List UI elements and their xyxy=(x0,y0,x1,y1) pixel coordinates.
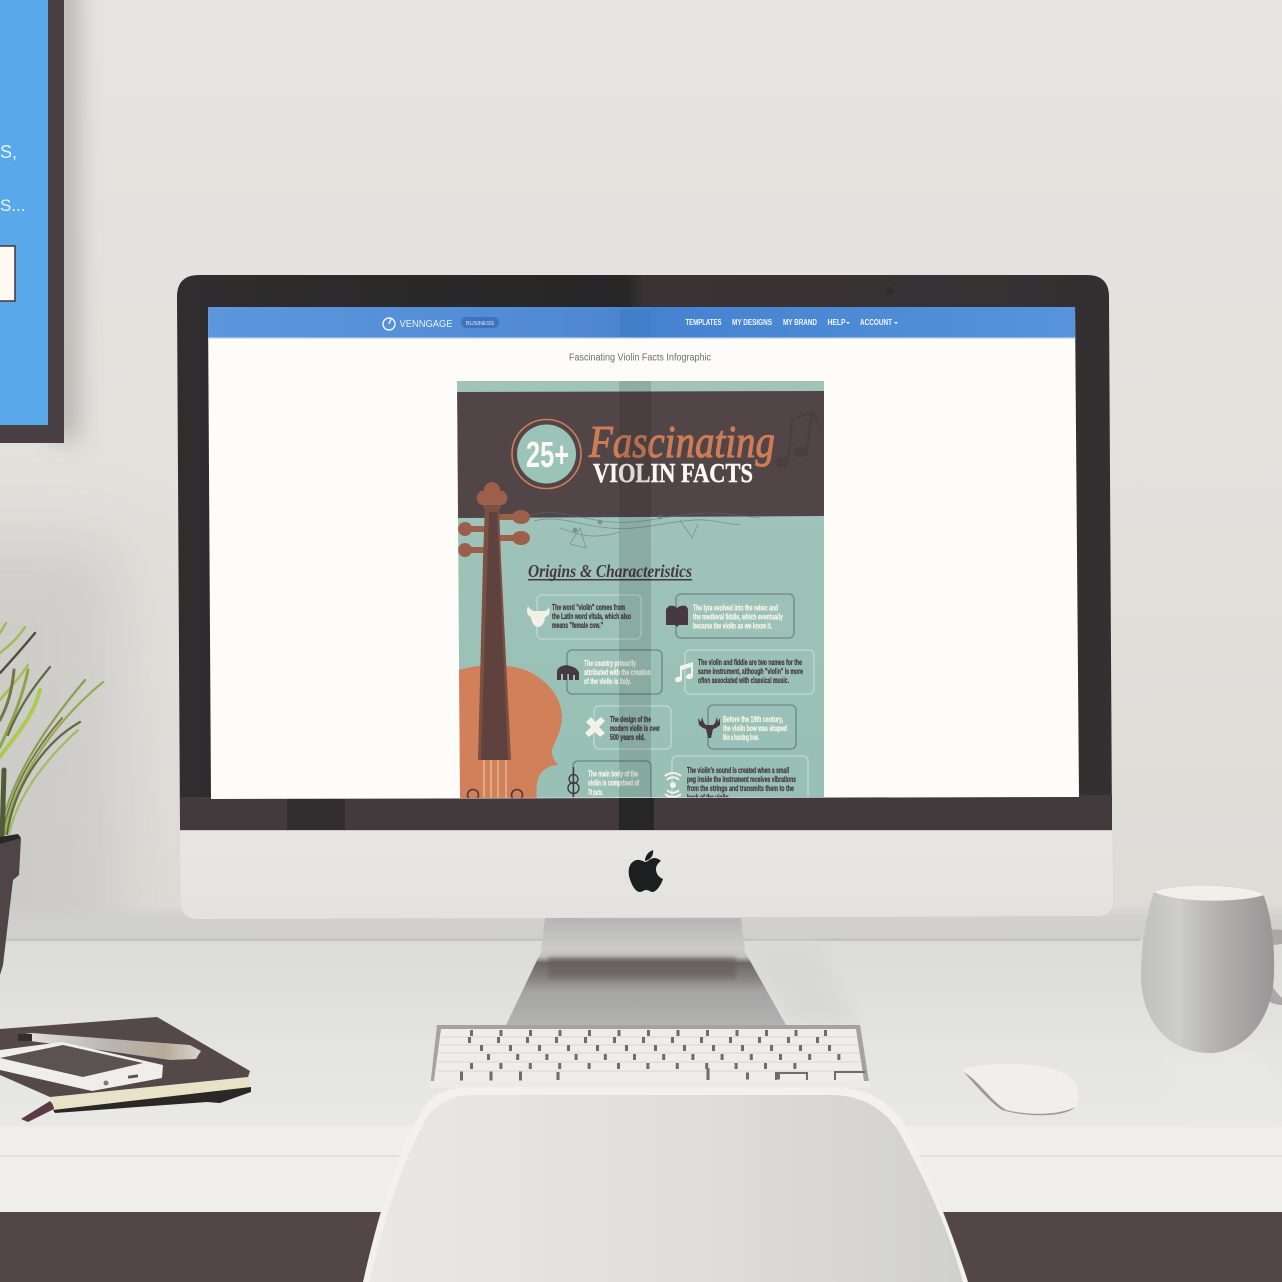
brand name: VENNGAGE xyxy=(400,319,453,330)
wall background xyxy=(0,0,1282,945)
infographic background xyxy=(455,381,827,801)
fingerboard xyxy=(481,512,508,760)
mouse xyxy=(962,1064,1078,1115)
business pill: BUSINESS xyxy=(466,321,494,327)
fact 8: from the strings and transmits them to the xyxy=(687,784,794,793)
monitor screen xyxy=(205,307,1080,806)
plant pot xyxy=(0,834,21,975)
poster text fragments: S, xyxy=(0,142,17,162)
icon: violin xyxy=(568,767,579,797)
faded music notes xyxy=(776,412,821,466)
fact 4: often associated with classical music. xyxy=(698,676,789,685)
fact 4: The violin and fiddle are two names for the xyxy=(698,658,802,667)
fact 3: of the violin is Italy. xyxy=(584,677,631,686)
count badge: 25+ xyxy=(526,434,569,475)
icon: colosseum xyxy=(557,665,579,680)
reflection band on infographic xyxy=(619,381,651,801)
chair xyxy=(363,1087,968,1282)
leaves xyxy=(0,623,103,838)
fact 7: The main body of the xyxy=(588,770,638,778)
navigation links: MY DESIGNS xyxy=(732,318,772,327)
monitor chin xyxy=(180,829,1113,919)
fact 8 xyxy=(664,755,809,798)
infographic xyxy=(455,381,827,806)
notebook pages xyxy=(50,1075,251,1111)
f holes xyxy=(466,788,524,798)
section heading: Origins & Characteristics xyxy=(528,561,692,581)
fact 6: like a hunting bow. xyxy=(723,733,759,742)
navigation links: ACCOUNT xyxy=(860,318,892,327)
navigation links: MY BRAND xyxy=(783,318,817,327)
navigation links: HELP xyxy=(828,318,846,327)
title script: Fascinating xyxy=(588,416,775,467)
apple logo xyxy=(629,850,663,892)
desk front edge xyxy=(0,1127,1282,1212)
fact 3: The country primarily xyxy=(584,659,636,668)
icon: music notes xyxy=(675,662,693,682)
icon: crossed bows xyxy=(585,717,605,737)
fact 6: Before the 19th century, xyxy=(723,715,783,724)
fact 4 xyxy=(675,650,814,694)
fact 1: means "female cow." xyxy=(552,621,603,630)
monitor bezel xyxy=(177,275,1112,830)
navigation links xyxy=(686,319,898,325)
header band xyxy=(457,391,824,518)
fact 1: the Latin word vitula, which also xyxy=(552,612,631,621)
fact 5: 500 years old. xyxy=(610,733,645,742)
navigation bar xyxy=(205,307,1080,339)
desk base dark xyxy=(0,1212,1282,1282)
fact 5 xyxy=(585,706,671,749)
poster white button xyxy=(0,246,15,301)
fact 8: The violin's sound is created when a small xyxy=(687,766,789,775)
fact 7: violin is comprised of xyxy=(588,778,639,788)
fact 5: The design of the xyxy=(610,715,651,724)
violin body xyxy=(455,665,562,800)
fact 7: 70 parts. xyxy=(588,788,603,797)
page title: Fascinating Violin Facts Infographic xyxy=(569,352,711,364)
count badge xyxy=(512,420,581,488)
fact 6 xyxy=(698,705,796,749)
icon: deer xyxy=(698,717,720,738)
notebook bookmark xyxy=(21,1101,56,1122)
plant xyxy=(0,623,103,838)
monitor stand xyxy=(506,918,786,1025)
wall shadow under monitor xyxy=(0,905,1282,940)
violin illustration xyxy=(455,482,562,800)
fact 2: became the violin as we know it. xyxy=(693,622,772,630)
fact 2: The lyra evolved into the rebec and xyxy=(693,604,778,612)
keyboard row lines xyxy=(437,1037,861,1071)
fact 3 xyxy=(557,650,662,694)
phone xyxy=(0,1042,163,1091)
business pill xyxy=(461,317,499,328)
fact 7 xyxy=(567,760,652,798)
fact 8: peg inside the instrument receives vibrations xyxy=(687,775,796,784)
fact 2: the medieval fiddle, which eventually xyxy=(693,612,783,622)
icon: bull xyxy=(527,606,550,627)
scroll head xyxy=(458,482,530,557)
desk top xyxy=(0,938,1282,1130)
wall poster xyxy=(0,0,64,443)
fact 2 xyxy=(666,594,794,638)
fact 8: back of the violin. xyxy=(687,793,730,802)
fact 1 xyxy=(527,595,641,639)
icon: vibration waves xyxy=(665,773,681,797)
notebook cover xyxy=(0,1017,250,1097)
navigation links: TEMPLATES xyxy=(686,318,722,327)
fact 4: same instrument, although "violin" is more xyxy=(698,667,803,676)
icon: open book xyxy=(666,606,688,627)
faded sheet music xyxy=(530,513,760,548)
keyboard xyxy=(430,1025,870,1088)
wall poster: S... xyxy=(0,196,26,215)
keyboard key gaps xyxy=(460,1033,865,1080)
title caps: VIOLIN FACTS xyxy=(593,458,753,488)
neck xyxy=(478,505,511,760)
fact 3: attributed with the creation xyxy=(584,668,651,677)
fact 5: modern violin is over xyxy=(610,724,660,733)
shadow on wall near poster and plant xyxy=(0,0,120,1020)
fact 1: The word "violin" comes from xyxy=(552,603,625,612)
fact 6: the violin bow was shaped xyxy=(723,724,787,733)
strings xyxy=(484,760,506,800)
notebook, phone and pen xyxy=(0,1017,251,1122)
pen xyxy=(18,1033,201,1060)
venngage logo xyxy=(383,318,395,330)
coffee mug xyxy=(1141,886,1282,1127)
